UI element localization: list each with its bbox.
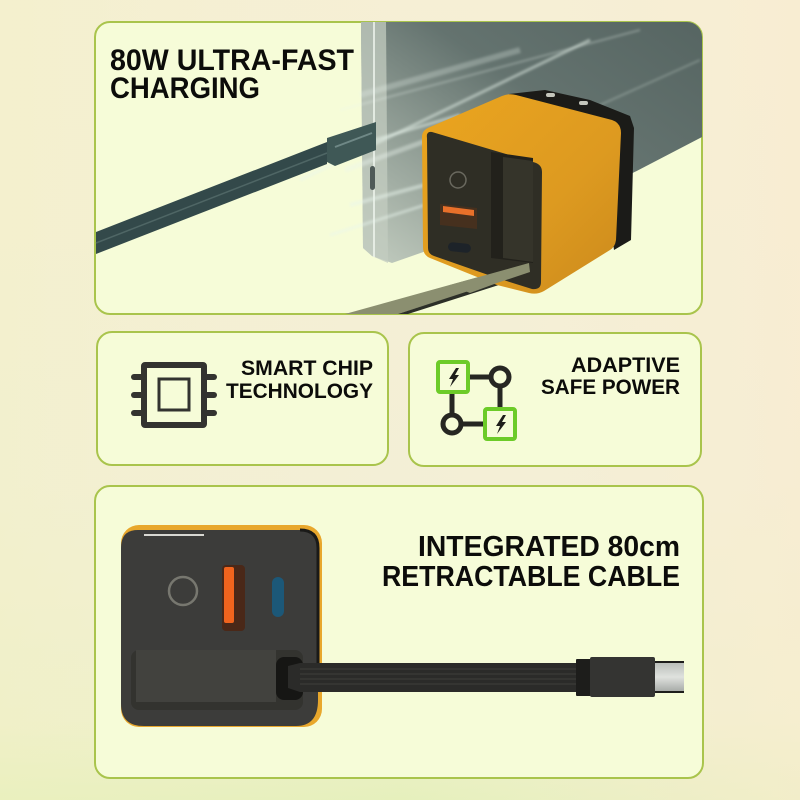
heading: 80W ULTRA-FAST <box>110 44 354 77</box>
charger front view <box>121 525 322 727</box>
charger <box>422 90 634 294</box>
phone <box>96 22 702 314</box>
panel: 80W ultra-fast charging <box>95 22 702 314</box>
USB-C port <box>272 577 284 617</box>
label: SMART CHIP <box>241 356 373 380</box>
icon: chip <box>134 365 214 425</box>
label: ADAPTIVE <box>571 353 680 377</box>
panel: integrated retractable cable <box>95 486 703 778</box>
cable slot <box>131 650 303 710</box>
label <box>226 356 373 403</box>
panel: smart chip technology <box>97 332 388 465</box>
USB-C port <box>448 242 471 253</box>
power button ring <box>169 577 197 605</box>
power button ring <box>450 172 466 188</box>
charging cable to phone <box>96 122 376 254</box>
label: TECHNOLOGY <box>226 379 373 403</box>
heading: CHARGING <box>110 72 260 105</box>
heading <box>382 531 680 593</box>
icon: power network <box>438 362 515 439</box>
speed lines <box>348 28 700 226</box>
label: SAFE POWER <box>541 375 680 399</box>
flat cable with USB-C connector <box>288 657 684 697</box>
heading: INTEGRATED 80cm <box>418 531 680 563</box>
label <box>541 353 680 399</box>
heading <box>110 44 354 105</box>
lower flat cable <box>346 277 478 314</box>
USB-A port <box>222 565 245 631</box>
heading: RETRACTABLE CABLE <box>382 561 680 593</box>
USB-A port <box>440 204 477 229</box>
panel: adaptive safe power <box>409 333 701 466</box>
